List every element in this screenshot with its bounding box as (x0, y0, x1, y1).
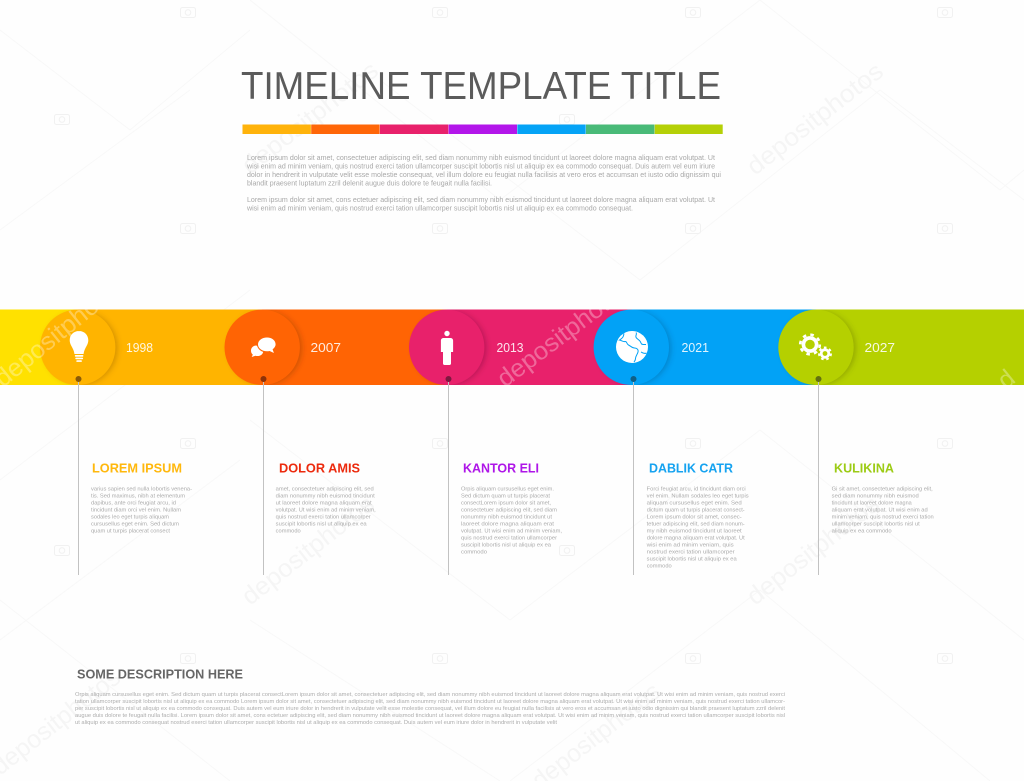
column: dablik catr: vel enim. Nullam sodales leo eget turpis (647, 493, 749, 499)
icon: gears (800, 335, 831, 360)
column: dablik catr: nostrud exerci tation ullamcorper (647, 549, 735, 555)
column: kulikina: tincidunt ut laoreet dolore magna (832, 500, 913, 506)
text: d (992, 364, 1021, 395)
text: depositphotos (741, 490, 885, 611)
rainbow title divider (242, 124, 723, 134)
year labels: 2021 (682, 341, 709, 355)
column: kantor eli: volutpat. Ut wisi enim ad minim veniam, (461, 528, 562, 534)
column: kantor eli: consectLorem ipsum dolor sit amet, (461, 500, 551, 506)
icon: light bulb (70, 331, 88, 362)
column: dolor amis (276, 460, 376, 534)
column: kulikina: sed diam nonummy nibh euismod (832, 493, 919, 499)
column: kulikina: Gi sit amet, consectetuer adipiscing elit, (832, 486, 933, 492)
column: lorem ipsum: tis. Sed maximus, nibh at elementum (91, 493, 185, 499)
column: dablik catr: commodo (647, 563, 672, 569)
column: kantor eli: Orpis aliquam cursusellus eget enim. (461, 486, 554, 492)
column: lorem ipsum: tincidunt diam orci vel enim. Nullam (91, 507, 181, 513)
description paragraph: ut aliquip ex ea commodo consequat nostrud exerci tation ullamcorper suscipit lobortis nisl ut aliquip ex ea commodo consequat. Duis autem vel eum iriure dolor in hendrerit in vulputate velit (75, 720, 557, 726)
timeline band (0, 310, 1024, 385)
description paragraph: Orpis aliquam cursusellus eget enim. Sed dictum quam ut turpis placerat consectLorem ipsum dolor sit amet, consectetuer adipiscing elit, sed diam nonummy nibh euismod tincidunt ut laoreet dolore magna aliquam erat volutpat. Ut wisi enim ad minim veniam, quis nostrud exerci (75, 692, 785, 698)
year labels: 2007 (310, 341, 341, 355)
column: dablik catr: wisi enim ad minim veniam, quis (646, 542, 734, 548)
icon: speech bubbles (251, 336, 277, 357)
column: kantor eli: Sed dictum quam ut turpis placerat (461, 493, 550, 499)
column: dablik catr: Lorem ipsum dolor sit amet, consec- (647, 514, 742, 520)
column: dablik catr: suscipit lobortis nisl ut aliquip ex ea (647, 556, 738, 562)
column: dolor amis: amet, consectetuer adipiscing elit, sed (276, 486, 374, 492)
column: dablik catr: tetuer adipiscing elit, sed diam nonum- (647, 521, 745, 527)
heading: dolor amis: DOLOR AMIS (279, 460, 360, 476)
step circle 2021 (594, 310, 671, 385)
step circle 2007 (225, 310, 302, 385)
column: kantor eli: laoreet dolore magna aliquam erat (461, 521, 554, 527)
column: dablik catr: aliquam cursusellus eget enim. Sed (647, 500, 742, 506)
description paragraph (75, 692, 785, 726)
column: dolor amis: suscipit lobortis nisl ut aliquip ex ea (276, 521, 368, 527)
intro text: wisi enim ad minim veniam, quis nostrud exerci tation ullamcorper suscipit lobortis nisl ut aliquip ex ea commodo consequat. Duis autem vel eum iriure (246, 162, 715, 170)
title: TIMELINE TEMPLATE TITLE (241, 65, 721, 108)
column: dablik catr (646, 460, 749, 569)
description paragraph: per suscipit lobortis nisl ut aliquip ex ea commodo consequat. Duis autem vel eum iriure dolor in hendrerit in vulputate velit esse molestie consequat, vel illum dolore eu feugiat nulla facilisis at vero eros et accumsan et iusto odio dignissim qui blandit praesent luptatum zzril delenit (75, 706, 785, 712)
column: lorem ipsum (91, 460, 192, 534)
column: lorem ipsum: varius sapien sed nulla lobortis venena- (91, 486, 192, 492)
heading: lorem ipsum: LOREM IPSUM (92, 460, 182, 476)
intro text: dolor in hendrerit in vulputate velit esse molestie consequat, vel illum dolore eu feugiat nulla facilisis at vero eros et accumsan et iusto odio dignissim qui (247, 170, 721, 179)
column: lorem ipsum: quam ut turpis placerat consect (91, 528, 170, 534)
column: dolor amis: commodo (276, 528, 301, 534)
column: kantor eli: nonummy nibh euismod tincidunt ut (461, 514, 552, 520)
intro text: blandit praesent luptatum zzril delenit augue duis dolore te feugait nulla facilisi. (247, 178, 492, 188)
column: lorem ipsum: dapibus, ante orci feugiat arcu, id (91, 500, 176, 506)
column: kulikina: aliquip ex ea commodo (832, 528, 892, 534)
icon: person (441, 331, 453, 365)
heading: kulikina: KULIKINA (834, 460, 895, 476)
heading: kantor eli: KANTOR ELI (463, 460, 539, 476)
intro text: wisi enim ad minim veniam, quis nostrud exerci tation ullamcorper suscipit lobortis nisl ut aliquip ex ea commodo consequat. (246, 204, 633, 212)
column: dablik catr: dictum quam ut turpis placerat consect- (647, 507, 745, 513)
icon: globe (616, 331, 648, 363)
text: depositphotos (492, 274, 636, 393)
column: dablik catr: Forci feugiat arcu, id tincidunt diam orci (647, 486, 746, 492)
description paragraph: augue duis dolore te feugait nulla facilisi. Lorem ipsum dolor sit amet, cons ectetuer adipiscing elit, sed diam nonummy nibh euismod tincidunt ut laoreet dolore magna aliquam erat volutpat. Ut wisi enim ad minim veniam, quis nostrud exerci tation ullamcorper suscipit lobortis nisl (75, 713, 785, 719)
column: kulikina: ullamcorper suscipit lobortis nisl ut (832, 521, 920, 527)
year labels: 2027 (864, 341, 895, 355)
year labels (126, 341, 895, 355)
text: depositphotos (236, 490, 380, 611)
column: kantor eli: consectetuer adipiscing elit, sed diam (461, 507, 557, 513)
connector lines (78, 382, 818, 575)
description heading: SOME DESCRIPTION HERE (77, 668, 243, 682)
text: depositphotos (236, 56, 384, 180)
column: lorem ipsum: cursusellus eget enim. Sed dictum (91, 521, 179, 527)
column: dolor amis: volutpat. Ut wisi enim ad minim veniam, (276, 507, 376, 513)
column: kantor eli: commodo (461, 549, 487, 555)
column: kantor eli (461, 460, 562, 555)
column: kulikina: minim veniam, quis nostrud exerci tation (832, 514, 934, 520)
step circle 1998 (40, 310, 118, 385)
column: kulikina (832, 460, 934, 534)
column: lorem ipsum: sodales leo eget turpis aliquam (91, 514, 169, 520)
intro text (246, 153, 721, 212)
column: dolor amis: diam nonummy nibh euismod tincidunt (276, 493, 375, 499)
intro text: Lorem ipsum dolor sit amet, consectetuer adipiscing elit, sed diam nonummy nibh euismod tincidunt ut laoreet dolore magna aliquam erat volutpat. Ut (247, 153, 715, 162)
column: dablik catr: my nibh euismod tincidunt ut laoreet (647, 528, 742, 534)
year labels: 2013 (496, 341, 524, 355)
column: dolor amis: ut laoreet dolore magna aliquam erat (276, 500, 372, 506)
step circle 2027 (778, 310, 856, 385)
year labels: 1998 (126, 341, 153, 355)
text: depositphotos (741, 57, 889, 181)
column: dablik catr: dolore magna aliquam erat volutpat. Ut (647, 535, 745, 541)
column: kulikina: aliquam erat volutpat. Ut wisi enim ad (832, 507, 928, 513)
column: kantor eli: quis nostrud exerci tation ullamcorper (461, 535, 557, 541)
description paragraph: tation ullamcorper suscipit lobortis nisl ut aliquip ex ea commodo Lorem ipsum dolor sit amet, consectetuer adipiscing elit, sed diam nonummy nibh euismod tincidunt ut laoreet dolore magna aliquam erat volutpat. Ut wisi enim ad minim veniam, quis nostrud exerci tation ullamcor- (75, 699, 785, 705)
column: dolor amis: quis nostrud exerci tation ullamcorper (276, 514, 371, 520)
column: kantor eli: suscipit lobortis nisl ut aliquip ex ea (461, 542, 552, 548)
step circle 2013 (409, 310, 487, 385)
heading: dablik catr: DABLIK CATR (649, 460, 734, 476)
intro text: Lorem ipsum dolor sit amet, cons ectetuer adipiscing elit, sed diam nonummy nibh euismod tincidunt ut laoreet dolore magna aliquam erat volutpat. Ut (247, 195, 715, 204)
